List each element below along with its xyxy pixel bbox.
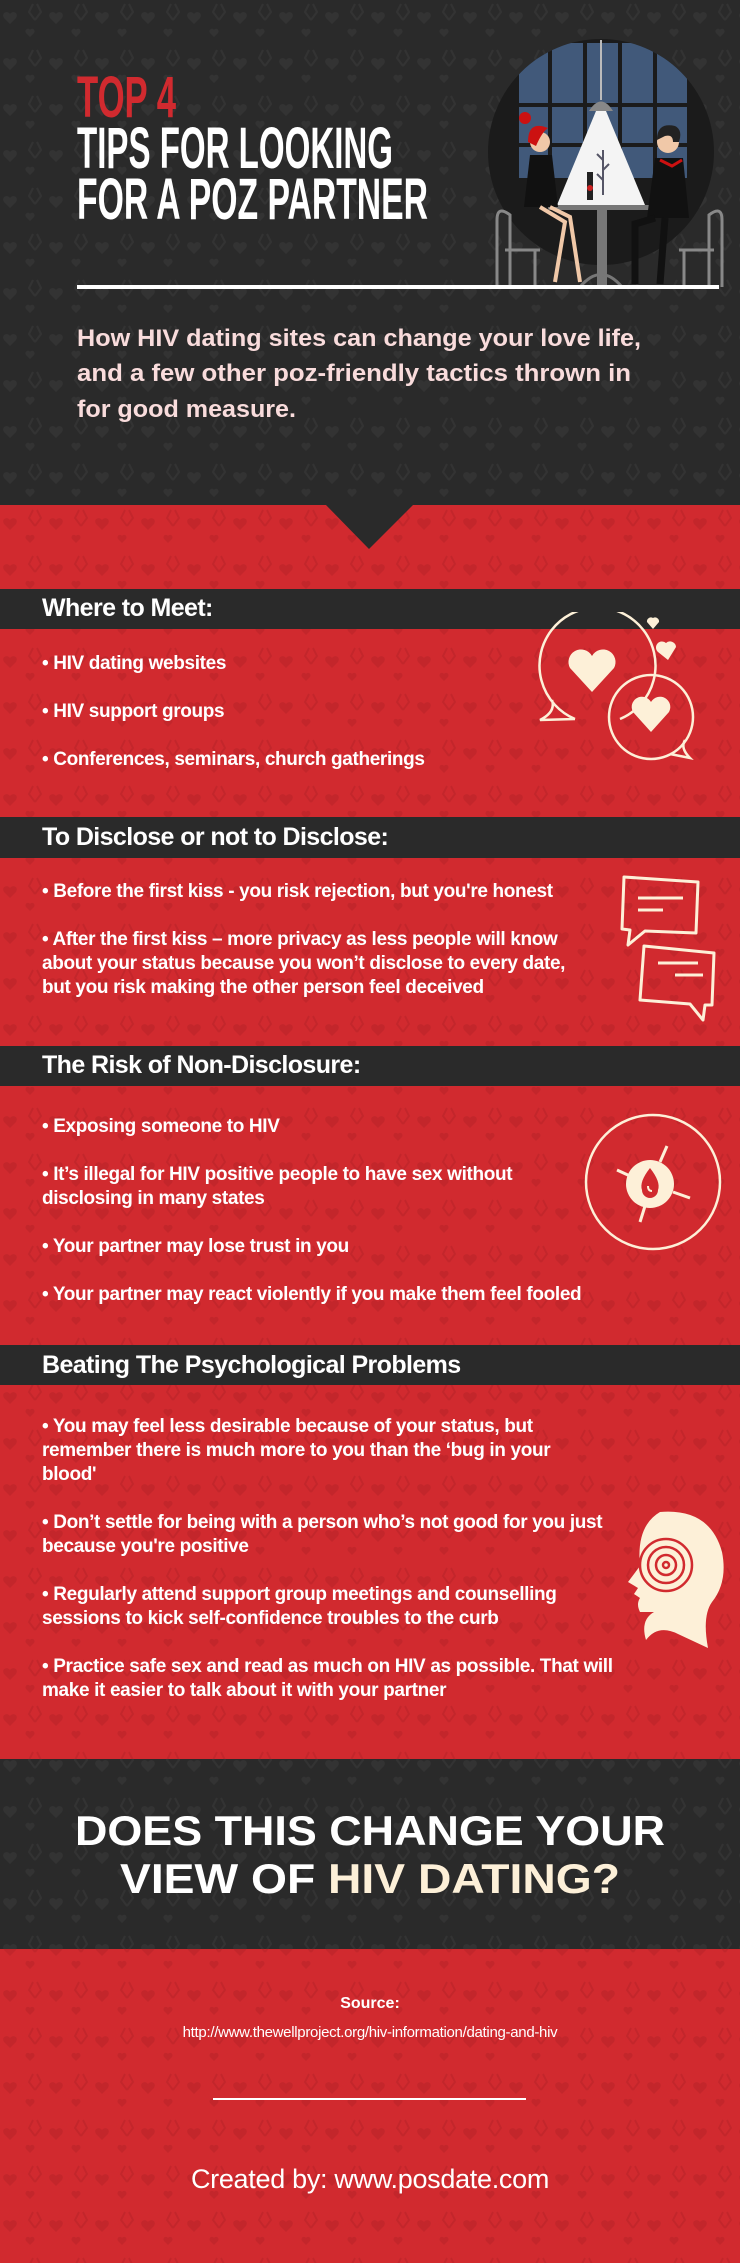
heading: where to meet: Where to Meet: [42,594,213,622]
bullets: psychological [42,1416,613,1701]
title: TIPS FOR LOOKING [77,116,393,181]
title [77,65,428,230]
subtitle: and a few other poz-friendly tactics thrown in [77,360,631,387]
bullets: to disclose: • Before the first kiss - you risk rejection, but you're honest [42,881,553,902]
bullets: where to meet [42,653,425,770]
source [183,1995,558,2041]
bullets: where to meet: • Conferences, seminars, church gatherings [42,749,425,770]
bullets: psychological: • You may feel less desirable because of your status, but remember there is much more to you than the ‘bug in your blood' [42,1416,550,1485]
icon: head with spiral [628,1512,724,1648]
bullets: psychological: • Don’t settle for being with a person who’s not good for you just because you're positive [42,1512,602,1557]
subtitle [77,325,641,423]
bullets: where to meet: • HIV support groups [42,701,224,722]
heading: beating psychological problems: Beating The Psychological Problems [42,1351,461,1379]
bullets: to disclose [42,881,565,998]
divider line [77,285,719,289]
icon: chat bubbles [620,876,716,1022]
bullets: risk: • Your partner may react violently if you make them feel fooled [42,1284,581,1305]
heading: risk of non-disclosure: The Risk of Non-Disclosure: [42,1051,361,1079]
credit: Created by: www.posdate.com [191,2164,549,2194]
bullets: psychological: • Practice safe sex and read as much on HIV as possible. That will make it easier to talk about it with your partner [42,1656,613,1701]
illustration: couple dining [488,39,724,287]
heading: to disclose: To Disclose or not to Disclose: [42,823,388,851]
subtitle: How HIV dating sites can change your love life, [77,325,641,352]
bullets: risk: • Exposing someone to HIV [42,1116,280,1137]
bullets: where to meet: • HIV dating websites [42,653,226,674]
closing question: VIEW OF HIV DATING? [120,1855,620,1902]
bullets: risk: • It’s illegal for HIV positive people to have sex without disclosing in many states [42,1164,512,1209]
bullets: to disclose: • After the first kiss – more privacy as less people will know about your status because you won’t disclose to every date, but you risk making the other person feel deceived [42,929,565,998]
bullets: risk [42,1116,581,1305]
bullets: risk: • Your partner may lose trust in you [42,1236,349,1257]
source: http://www.thewellproject.org/hiv-information/dating-and-hiv [183,2024,557,2041]
closing question: DOES THIS CHANGE YOUR [75,1807,665,1854]
bullets: psychological: • Regularly attend support group meetings and counselling sessions to kick self-confidence troubles to the curb [42,1584,557,1629]
title: TOP 4 [77,65,176,130]
source: Source: [340,1995,400,2012]
subtitle: for good measure. [77,396,296,423]
icon: virus blood drop [584,1114,722,1250]
closing question [75,1807,665,1902]
icon: heart speech bubbles [538,612,694,760]
